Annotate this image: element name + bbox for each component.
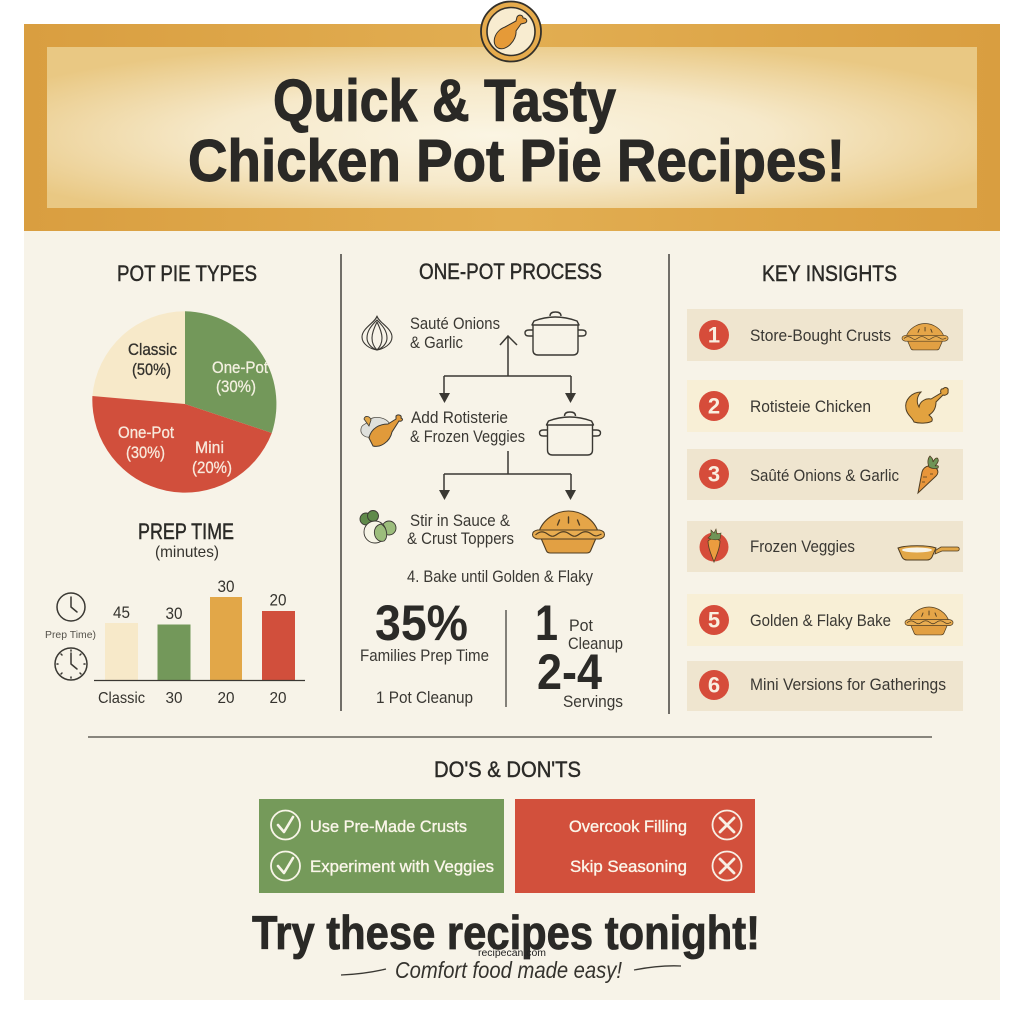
- stat: 35 percent: [360, 595, 489, 707]
- step 3 text: [407, 511, 514, 548]
- insight 6: [687, 661, 963, 711]
- heading: key insights: KEY INSIGHTS: [762, 261, 897, 286]
- icon: cross: [712, 810, 742, 840]
- title line 1: Quick & Tasty: [273, 68, 616, 134]
- subheading: minutes: (minutes): [155, 544, 219, 561]
- icon: pot: [540, 412, 600, 455]
- insight 2: Rotisteie Chicken: [750, 397, 871, 416]
- panel: do's: [259, 799, 504, 893]
- bar chart: 20: [218, 690, 235, 707]
- prep time side label: Prep Time): [45, 629, 96, 641]
- arrow: split to step 3: [439, 451, 576, 500]
- panel: do's: Experiment with Veggies: [310, 857, 494, 876]
- icon: pot: [525, 312, 586, 355]
- pie chart: [92, 311, 276, 493]
- header banner: [24, 24, 1000, 231]
- tagline: Comfort food made easy!: [395, 957, 623, 983]
- icon: check: [271, 852, 300, 880]
- icon: clock: [57, 593, 85, 621]
- icon: vegetables: [360, 510, 396, 543]
- insight 4: [687, 521, 963, 572]
- panel: one-pot process: [360, 259, 623, 711]
- pie chart: (20%): [192, 459, 232, 477]
- stat: 35 percent: 35%: [375, 595, 468, 651]
- step 2 text: & Frozen Veggies: [410, 427, 525, 446]
- arrow: split to step 2: [439, 336, 576, 403]
- icon: chicken drumstick badge: [481, 2, 541, 62]
- icon: check: [271, 810, 300, 840]
- step 3 text: Stir in Sauce &: [410, 511, 511, 530]
- insight 5: Golden & Flaky Bake: [750, 611, 891, 630]
- stat: 1 pot cleanup: 1: [535, 595, 558, 651]
- heading: do's and don'ts: DO'S & DON'TS: [434, 757, 581, 782]
- stat: 1 pot cleanup: [535, 595, 623, 653]
- insight 5: [687, 594, 963, 646]
- step 1 text: [410, 314, 500, 352]
- bar chart: 45: [113, 604, 130, 622]
- pie chart: One-Pot: [212, 359, 268, 377]
- insight 1: 1: [708, 322, 720, 348]
- stat: 35 percent: 1 Pot Cleanup: [376, 688, 473, 707]
- panel: don'ts: [515, 799, 755, 893]
- insight 6: 6: [708, 672, 720, 698]
- bar chart: 30: [218, 578, 234, 596]
- icon: cross: [712, 852, 742, 880]
- icon: clock with ticks: [55, 648, 87, 680]
- insight 6: Mini Versions for Gatherings: [750, 675, 946, 694]
- bar chart: [94, 578, 305, 707]
- stat: 2-4 servings: Servings: [563, 692, 623, 711]
- insight 5: 5: [708, 608, 720, 632]
- insight 3: [687, 449, 963, 500]
- icon: onion: [362, 316, 392, 350]
- heading: pot pie types: POT PIE TYPES: [117, 261, 257, 286]
- panel: don'ts: Skip Seasoning: [570, 857, 687, 876]
- panel: key insights: [687, 261, 963, 711]
- insight 3: 3: [708, 462, 720, 486]
- bar chart: 30: [166, 690, 183, 707]
- bar chart: Classic: [98, 690, 145, 707]
- panel: pot pie types: [45, 261, 305, 707]
- insight 2: [687, 380, 963, 432]
- pie chart: (30%): [126, 444, 165, 462]
- stat: 1 pot cleanup: Cleanup: [568, 634, 623, 653]
- icon: rotisserie chicken and veggies: [361, 415, 402, 446]
- icon: pot pie: [532, 511, 604, 553]
- stat: 35 percent: Families Prep Time: [360, 646, 489, 665]
- insight 4: Frozen Veggies: [750, 537, 855, 556]
- step 4 text: 4. Bake until Golden & Flaky: [407, 567, 593, 586]
- insight 1: [687, 309, 963, 361]
- panel: do's: Use Pre-Made Crusts: [310, 817, 467, 836]
- pie chart: (30%): [216, 378, 256, 396]
- step 1 text: Sauté Onions: [410, 314, 500, 333]
- heading: prep time: PREP TIME: [138, 519, 234, 544]
- step 2 text: Add Rotisterie: [411, 408, 508, 427]
- watermark: recipecan.com: [478, 948, 546, 959]
- title line 2: Chicken Pot Pie Recipes!: [188, 128, 845, 194]
- step 1 text: & Garlic: [410, 333, 463, 352]
- bar chart: 20: [270, 690, 287, 707]
- call to action: Try these recipes tonight!: [252, 906, 760, 959]
- insight 1: Store-Bought Crusts: [750, 326, 891, 345]
- stat: 2-4 servings: 2-4: [537, 644, 602, 700]
- pie chart: (50%): [132, 361, 171, 379]
- heading: one-pot process: ONE-POT PROCESS: [419, 259, 602, 284]
- stat: 1 pot cleanup: Pot: [569, 616, 593, 635]
- bar chart: 30: [166, 605, 182, 623]
- step 2 text: [410, 408, 525, 446]
- step 3 text: & Crust Toppers: [407, 529, 514, 548]
- pie chart: Classic: [128, 341, 177, 359]
- pie chart: One-Pot: [118, 424, 174, 442]
- panel: don'ts: Overcook Filling: [569, 817, 687, 836]
- bar chart: 20: [270, 592, 286, 610]
- pie chart: Mini: [195, 439, 224, 457]
- insight 3: Saûté Onions & Garlic: [750, 466, 899, 485]
- insight 2: 2: [708, 394, 720, 418]
